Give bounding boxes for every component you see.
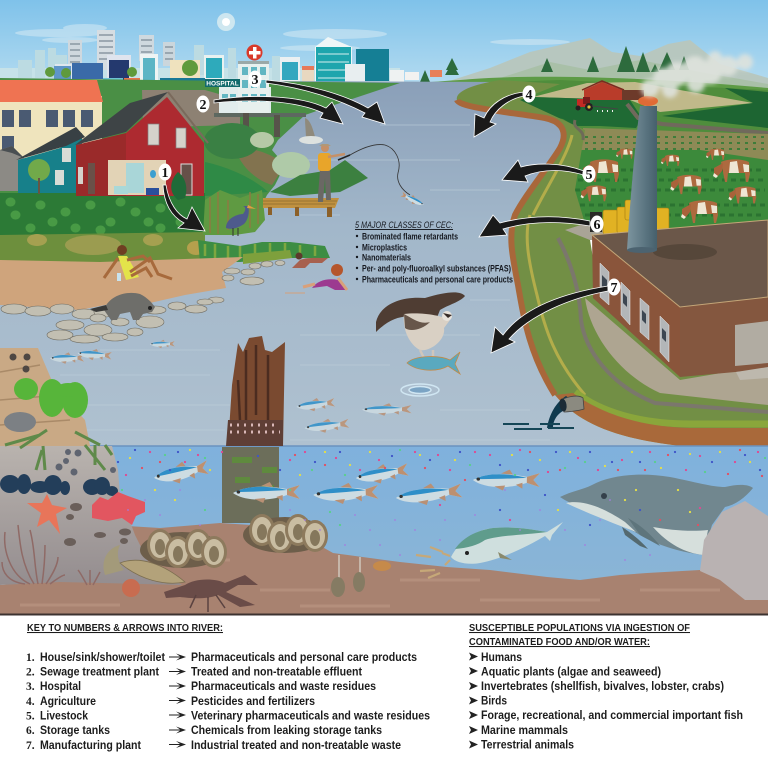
wall: left side xyxy=(592,235,680,377)
text block: 5 major classes of CEC: Nanomaterials xyxy=(362,252,411,264)
panel: key to numbers and arrows xyxy=(26,622,430,752)
pebbles xyxy=(56,449,116,476)
icon: osprey carrying a fish xyxy=(376,292,465,374)
key sources: Livestock xyxy=(40,710,89,722)
number badges xyxy=(158,70,620,296)
badge 7 xyxy=(608,278,620,296)
icon: lobster xyxy=(164,575,258,612)
key sources: Storage tanks xyxy=(40,725,110,737)
panel: susceptible populations xyxy=(469,622,743,752)
icon: raccoon xyxy=(90,293,155,320)
surface fish seen from above xyxy=(50,340,412,435)
icon: sunbather xyxy=(104,245,172,281)
effluent discharge xyxy=(299,118,323,144)
water column xyxy=(100,446,768,614)
badge 1: 1 xyxy=(162,166,168,181)
badge 4 xyxy=(522,86,536,103)
key contaminants: Pharmaceuticals and personal care products xyxy=(191,652,417,664)
icon: fisherman with rod xyxy=(318,144,426,209)
population list: Humans xyxy=(481,652,522,664)
recreational fish with prey xyxy=(416,522,563,578)
badge 1 xyxy=(158,164,172,181)
prey fish xyxy=(407,352,460,374)
key contaminants: Veterinary pharmaceuticals and waste residues xyxy=(191,710,430,722)
key numbers: 6. xyxy=(26,725,35,737)
key sources: Hospital xyxy=(40,681,81,693)
pebbles lower xyxy=(64,503,131,546)
riverside bushes xyxy=(204,123,310,196)
key contaminants: Pharmaceuticals and waste residues xyxy=(191,681,376,693)
arrow 4: agriculture xyxy=(474,92,524,137)
panel: distant green hills and trees xyxy=(300,46,768,130)
key numbers: 7. xyxy=(26,740,35,752)
sky background xyxy=(0,0,768,112)
icon: red house with cutaway bathroom xyxy=(75,92,208,200)
key sources: Manufacturing plant xyxy=(40,740,141,752)
text block: 5 major classes of CEC: Brominated flame retardants xyxy=(362,232,458,242)
badge 3: 3 xyxy=(252,73,258,88)
concrete apron xyxy=(585,298,768,405)
farm road xyxy=(627,104,768,133)
field: right crop rows xyxy=(662,88,768,128)
post barnacles xyxy=(226,345,283,446)
pasture xyxy=(572,128,768,240)
roof xyxy=(592,220,768,307)
icon: swimmer in purple xyxy=(285,264,347,293)
icon: red barn xyxy=(582,81,644,100)
post below water xyxy=(222,447,279,523)
crop row field xyxy=(580,128,768,160)
text block: 5 major classes of CEC xyxy=(355,220,513,286)
key heading: KEY TO NUMBERS & ARROWS INTO RIVER: xyxy=(27,622,223,634)
hospital sign: HOSPITAL xyxy=(206,80,239,88)
reeds behind fisherman xyxy=(270,160,368,196)
key numbers: 4. xyxy=(26,696,35,708)
oyster reef: right xyxy=(243,514,328,553)
right seabed boulder xyxy=(700,501,768,600)
beach sand xyxy=(0,257,243,310)
lower brown bank xyxy=(555,393,768,447)
population list: Forage, recreational, and commercial important fish xyxy=(481,710,743,722)
badge 6: 6 xyxy=(594,218,600,233)
populations heading: CONTAMINATED FOOD AND/OR WATER: xyxy=(469,636,650,648)
population list: Marine mammals xyxy=(481,725,568,737)
icons: grazing cows xyxy=(581,149,756,223)
oyster reef: left xyxy=(140,529,227,568)
arrow 6: storage tanks xyxy=(479,215,590,237)
heron xyxy=(226,205,256,236)
glow at stack top xyxy=(638,96,658,106)
populations heading xyxy=(469,622,691,648)
icon: wooden dock xyxy=(263,198,339,217)
icon: starfish xyxy=(27,494,67,534)
wall doors xyxy=(600,263,669,362)
red coral xyxy=(92,492,145,525)
key sources: Sewage treatment plant xyxy=(40,666,159,678)
badge 2 xyxy=(196,96,210,113)
rotting wooden post above water xyxy=(228,336,285,446)
grass strip and shoreline xyxy=(198,240,330,264)
forage fish school xyxy=(153,457,540,508)
frame base line xyxy=(0,614,768,616)
mussels on stalks xyxy=(331,555,391,597)
key contaminants: Pesticides and fertilizers xyxy=(191,696,315,708)
arrow 5: livestock xyxy=(502,160,584,182)
badge 2: 2 xyxy=(200,98,206,113)
smoke stack xyxy=(627,106,657,250)
left tide pool rock xyxy=(0,348,185,597)
icon: grey house xyxy=(0,146,24,191)
icon: sun xyxy=(217,13,235,31)
icon: sewage pipe xyxy=(214,113,306,137)
key sources: Agriculture xyxy=(40,696,96,708)
rock above water xyxy=(0,348,90,446)
badge 5 xyxy=(582,166,596,183)
text block: 5 major classes of CEC: 5 MAJOR CLASSES OF CEC: xyxy=(355,220,453,231)
flounder xyxy=(120,560,185,583)
loading door xyxy=(735,321,768,380)
arrow 1: house xyxy=(163,185,205,231)
sand dollar xyxy=(122,579,140,597)
roof shadow xyxy=(653,244,717,260)
panel: right river bank xyxy=(457,80,768,447)
icon: reeds and heron xyxy=(203,190,265,236)
key numbers: 2. xyxy=(26,666,35,678)
wall: right side xyxy=(680,297,768,377)
panel: river surface xyxy=(0,80,690,447)
arrows into the river xyxy=(163,80,608,353)
sea pen / urchin xyxy=(2,525,100,585)
rocks along shore xyxy=(1,260,285,343)
key numbers xyxy=(26,652,35,752)
icon: red tractor xyxy=(576,97,618,111)
key numbers: 3. xyxy=(26,681,35,693)
populations heading: SUSCEPTIBLE POPULATIONS VIA INGESTION OF xyxy=(469,622,691,634)
population list: Birds xyxy=(481,696,507,708)
icon: teal house xyxy=(16,127,85,194)
water ripple xyxy=(401,384,439,396)
text block: 5 major classes of CEC: Per- and poly-fluoroalkyl substances (PFAS) xyxy=(362,264,511,274)
icon: trees on roofs xyxy=(45,60,198,78)
barnacle cluster xyxy=(4,412,36,432)
rock below water xyxy=(0,446,182,585)
waterline xyxy=(0,445,768,447)
green seaweed xyxy=(14,378,88,418)
text block: 5 major classes of CEC: Microplastics xyxy=(362,242,407,254)
panel: underwater section xyxy=(0,446,768,614)
population list: Invertebrates (shellfish, bivalves, lobster, crabs) xyxy=(481,681,724,693)
field: beige harvest field xyxy=(533,82,753,112)
key sources xyxy=(40,652,165,752)
key numbers: 5. xyxy=(26,710,35,722)
population list: Terrestrial animals xyxy=(481,740,574,752)
feather plant xyxy=(103,545,124,575)
key contaminants: Treated and non-treatable effluent xyxy=(191,666,362,678)
field: dark crop rows xyxy=(473,97,642,128)
building: hospital xyxy=(205,44,271,116)
microplastic particles xyxy=(118,450,765,560)
text block: 5 major classes of CEC: Pharmaceuticals and personal care products xyxy=(362,274,513,286)
key arrows xyxy=(169,654,186,748)
sea bed xyxy=(0,523,768,614)
population list xyxy=(481,652,743,752)
icon: red cross xyxy=(246,44,262,60)
panel: farmland and agriculture xyxy=(460,80,768,240)
arrow 2: sewage plant xyxy=(214,96,343,124)
key contaminants xyxy=(191,652,430,752)
arrow 3: hospital xyxy=(266,80,385,124)
icon: storage tanks xyxy=(565,200,669,240)
icon: swimmer in red xyxy=(292,252,328,268)
smoke plume xyxy=(641,51,753,98)
mountains xyxy=(440,38,768,92)
arrow 7: manufacturing plant xyxy=(491,286,608,353)
icon: dolphin xyxy=(560,475,753,555)
population list: Aquatic plants (algae and seaweed) xyxy=(481,666,661,678)
icon: outfall pipe xyxy=(503,396,584,429)
badge 7: 7 xyxy=(610,281,618,296)
black mussels xyxy=(0,474,118,496)
badge 3 xyxy=(248,70,262,88)
lower green strip xyxy=(575,392,768,424)
clouds xyxy=(15,24,570,51)
city skyline xyxy=(0,30,404,120)
panel: manufacturing plant xyxy=(585,51,768,405)
service road xyxy=(558,238,768,412)
key sources: House/sink/shower/toilet xyxy=(40,652,165,664)
badge 5: 5 xyxy=(586,168,592,183)
badge 6 xyxy=(590,216,604,233)
key contaminants: Chemicals from leaking storage tanks xyxy=(191,725,382,737)
lawn foliage xyxy=(0,193,205,262)
building: yellow apartment xyxy=(0,80,103,176)
sea grass xyxy=(5,430,112,470)
building: sewage tank xyxy=(142,90,240,128)
badge 4: 4 xyxy=(526,88,532,103)
key numbers: 1. xyxy=(26,652,35,664)
population bullets xyxy=(469,652,478,748)
key contaminants: Industrial treated and non-treatable waste xyxy=(191,740,401,752)
panel: left shore land xyxy=(0,44,400,262)
